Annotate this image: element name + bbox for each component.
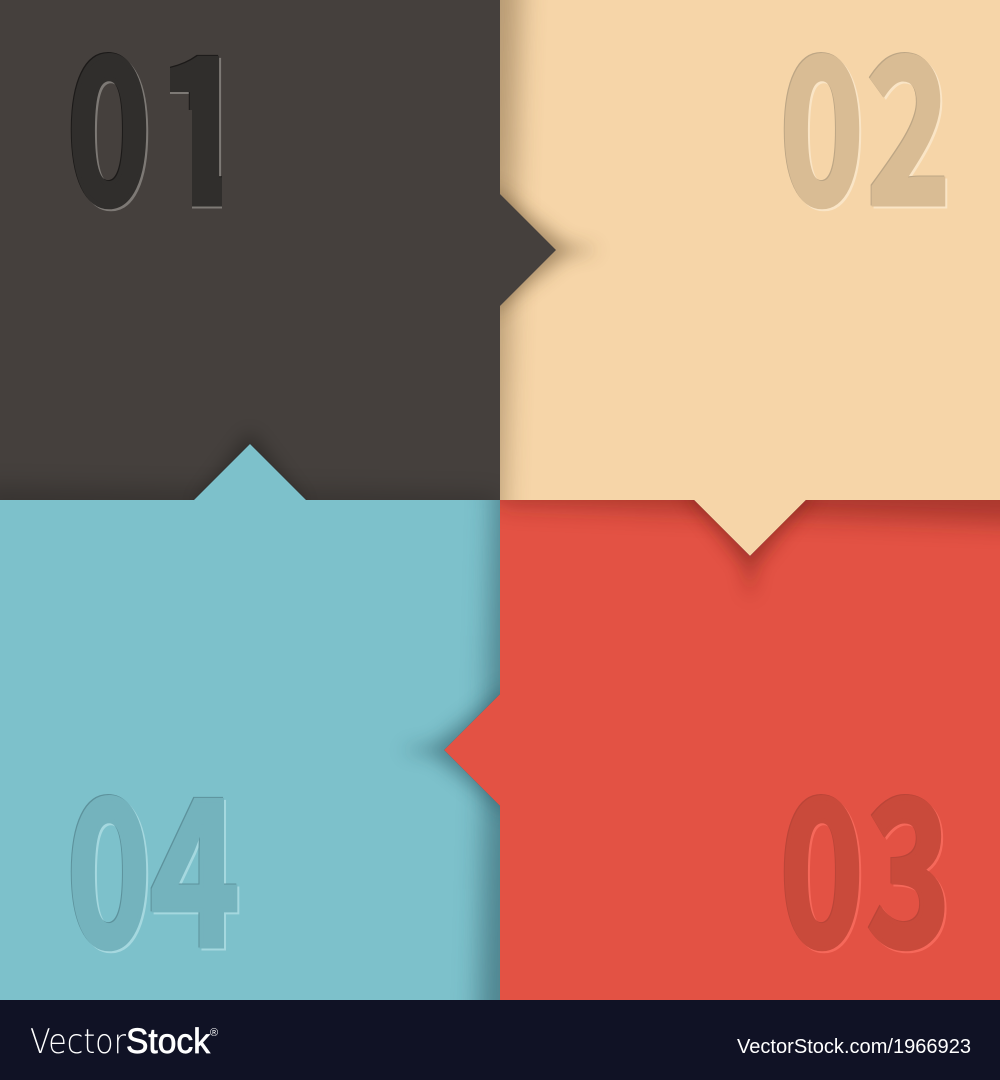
panel: 02 beige <box>470 0 1000 556</box>
number 04: 0 <box>69 715 153 1007</box>
number 04: 4 <box>150 713 240 1005</box>
number 04: 4 <box>152 715 242 1007</box>
number 02 <box>779 0 953 265</box>
number 03: 0 <box>780 713 864 1005</box>
footer logo: ® <box>210 1027 218 1039</box>
number 04: 0 <box>67 713 151 1005</box>
footer logo <box>30 1022 218 1062</box>
panel: 04 blue <box>0 444 500 1000</box>
number 03: 3 <box>867 713 951 1005</box>
number 04 <box>66 712 242 1007</box>
number 04: 4 <box>149 712 239 1004</box>
number 03: 3 <box>866 712 950 1004</box>
footer logo: Stock <box>126 1022 210 1061</box>
panel: 03 red <box>444 470 1000 1007</box>
number 03: 3 <box>869 715 953 1007</box>
number 01 <box>70 52 222 212</box>
footer image id: VectorStock.com/1966923 <box>737 1036 971 1058</box>
number 03 <box>779 712 953 1007</box>
number 03: 0 <box>779 712 863 1004</box>
panel: 01 dark <box>0 0 556 520</box>
footer logo: Vector <box>30 1022 126 1062</box>
number 03: 0 <box>782 715 866 1007</box>
number 04: 0 <box>66 712 150 1004</box>
footer bar <box>0 1000 1000 1080</box>
